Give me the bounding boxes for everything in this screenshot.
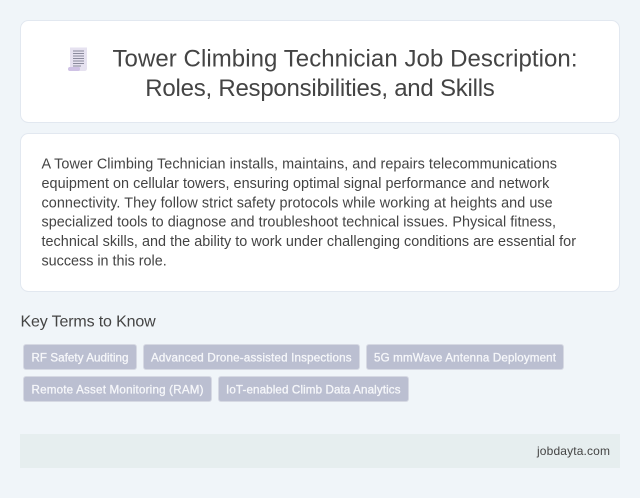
description text xyxy=(42,156,576,270)
panel: description card xyxy=(20,134,620,292)
description text: A Tower Climbing Technician installs, maintains, and repairs telecommunications xyxy=(42,156,557,172)
tag: 5G mmWave Antenna Deployment xyxy=(366,344,564,370)
heading: key terms: Key Terms to Know xyxy=(20,314,156,331)
tag: Advanced Drone-assisted Inspections xyxy=(144,344,360,370)
tag: IoT-enabled Climb Data Analytics xyxy=(218,376,408,402)
tag list xyxy=(24,344,564,402)
footer bar xyxy=(20,434,620,468)
title xyxy=(112,46,578,102)
icon: scroll document xyxy=(68,48,87,71)
footer source text: jobdayta.com xyxy=(536,444,610,458)
panel: title card xyxy=(20,20,620,122)
description text: technical skills, and the ability to work under challenging conditions are essential for xyxy=(42,234,576,250)
tag: 5G mmWave Antenna Deployment: 5G mmWave Antenna Deployment xyxy=(374,351,557,364)
tag: Remote Asset Monitoring (RAM) xyxy=(24,376,212,402)
tag: RF Safety Auditing xyxy=(24,344,136,370)
title: Tower Climbing Technician Job Description: xyxy=(112,46,578,73)
tag: RF Safety Auditing: RF Safety Auditing xyxy=(32,351,128,364)
tag: IoT-enabled Climb Data Analytics: IoT-enabled Climb Data Analytics xyxy=(226,383,401,396)
tag: Remote Asset Monitoring (RAM): Remote Asset Monitoring (RAM) xyxy=(32,383,204,396)
tag: Advanced Drone-assisted Inspections: Advanced Drone-assisted Inspections xyxy=(151,351,352,364)
description text: equipment on cellular towers, ensuring optimal signal performance and network xyxy=(42,176,550,192)
description text: specialized tools to diagnose and troubleshoot technical issues. Physical fitness, xyxy=(42,215,556,231)
description text: connectivity. They follow strict safety protocols while working at heights and use xyxy=(42,195,553,211)
description text: success in this role. xyxy=(42,254,167,270)
title: Roles, Responsibilities, and Skills xyxy=(145,75,495,102)
